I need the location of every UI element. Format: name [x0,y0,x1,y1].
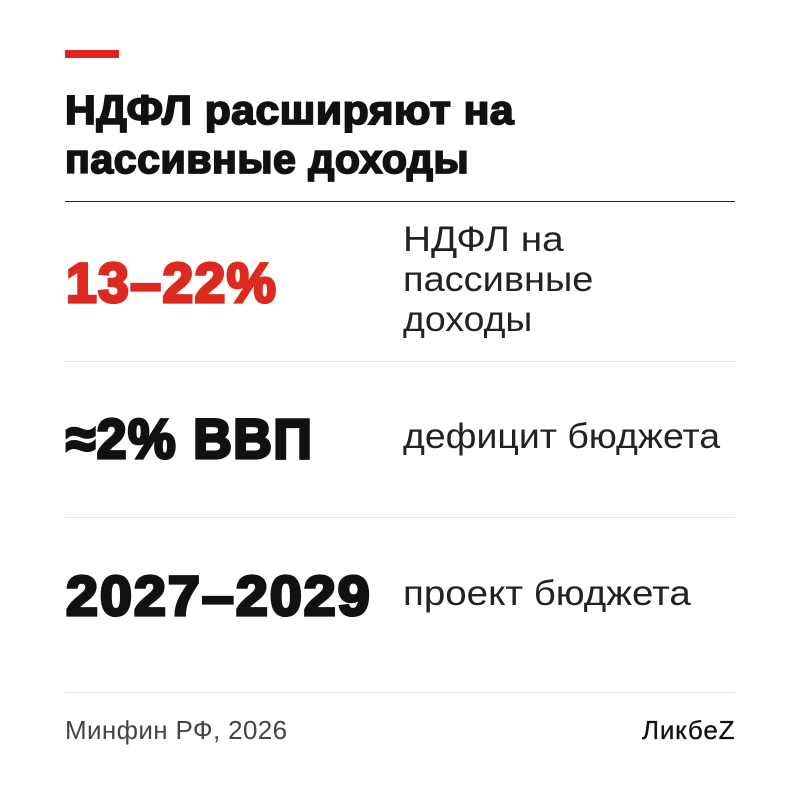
label: rate [403,220,593,339]
title: НДФЛ расширяют на [65,87,514,133]
title [65,87,515,182]
label: rate: НДФЛ на [403,220,564,259]
label: rate: пассивные [403,260,593,299]
accent bar [65,50,119,58]
label: years: проект бюджета [403,574,691,613]
source: Минфин РФ, 2026 [65,715,287,745]
label: rate: доходы [403,300,532,339]
stat: years: 2027–2029 [66,564,372,627]
stat: deficit: ≈2% ВВП [66,407,313,470]
stat: rate: 13–22% [66,251,277,314]
title: пассивные доходы [65,136,469,182]
brand: ЛикбеZ [642,715,735,745]
label: deficit: дефицит бюджета [403,417,720,456]
